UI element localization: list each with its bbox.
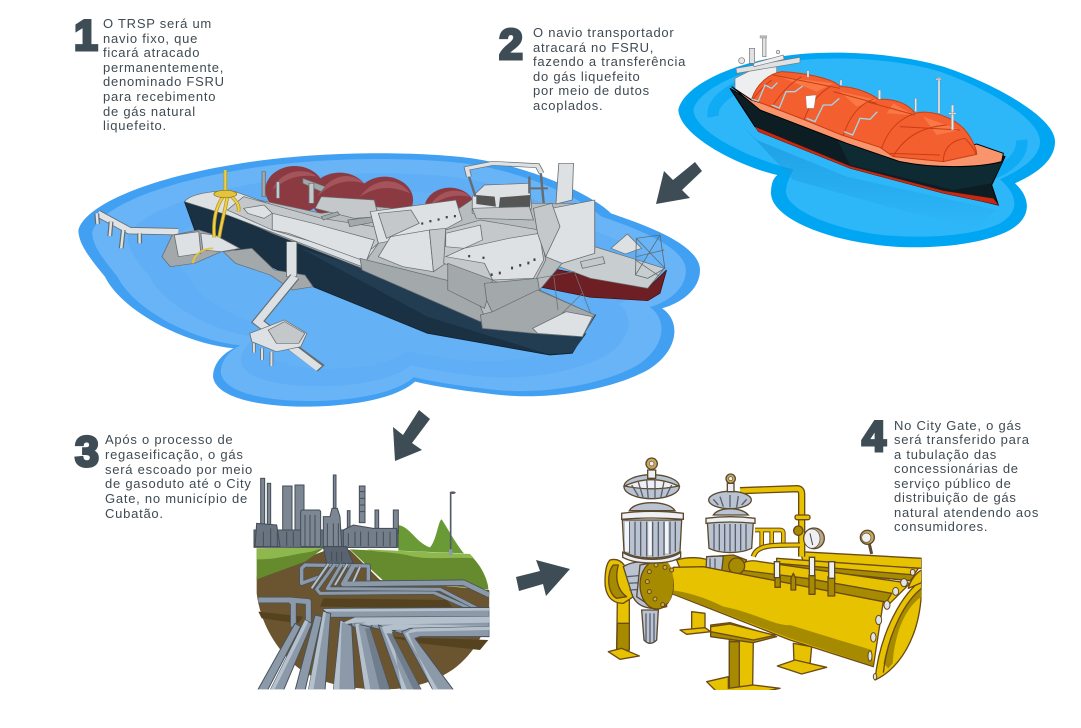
ship deck <box>732 87 1003 167</box>
trestle <box>258 277 321 368</box>
big actuator <box>622 458 683 563</box>
refinery and pipelines <box>254 475 489 691</box>
arm <box>98 213 178 232</box>
yard and fore deck equipment <box>227 197 378 257</box>
step 1 text: O TRSP será um <box>103 16 212 31</box>
step 2 text: por meio de dutos <box>533 83 650 98</box>
water: FSRU <box>78 153 700 407</box>
step 1 text: permanentemente, <box>103 60 224 75</box>
step 3 text: Após o processo de <box>105 432 233 447</box>
spherical tanks <box>265 166 475 229</box>
supports <box>680 612 827 692</box>
refinery skyline <box>254 475 398 563</box>
instruments <box>774 557 835 596</box>
step 1 text: de gás natural <box>103 104 196 119</box>
main cylinder <box>667 567 883 667</box>
column <box>287 242 297 277</box>
arrow: FSRU to pipeline <box>393 410 430 461</box>
step 2 text: fazendo a transferência <box>533 54 686 69</box>
arrow: pipeline to city gate <box>516 560 570 596</box>
step 4 text: natural atendendo aos <box>894 505 1039 520</box>
step 4 text: concessionárias de <box>894 461 1019 476</box>
back pipes <box>800 552 922 568</box>
street lamp <box>449 491 456 555</box>
step 3 number: 3 <box>75 428 99 476</box>
end flange <box>868 569 922 680</box>
step 4 text: No City Gate, o gás <box>894 418 1022 433</box>
step 3 text: de gasoduto até o City <box>105 476 252 491</box>
yellow gantry <box>214 170 239 237</box>
masts <box>806 71 956 130</box>
FSRU ship <box>184 163 596 355</box>
step 4 text: a tubulação das <box>894 447 997 462</box>
ship superstructure <box>735 36 800 100</box>
step 4 text: consumidores. <box>894 519 988 534</box>
bow deck <box>184 191 378 267</box>
step 2 text: O navio transportador <box>533 25 674 40</box>
second actuator <box>706 474 755 575</box>
step 3 text: Cubatão. <box>105 506 164 521</box>
step 1 text: ficará atracado <box>103 45 200 60</box>
step 1 number: 1 <box>74 12 98 60</box>
step 3 text: Gate, no município de <box>105 491 248 506</box>
rear block <box>556 163 573 204</box>
deck base <box>227 195 595 337</box>
left valve and flange <box>605 559 674 659</box>
step 1 text: navio fixo, que <box>103 31 198 46</box>
ship hull <box>730 88 1005 205</box>
step 2 text: atracará no FSRU, <box>533 40 654 55</box>
step 1 text: denominado FSRU <box>103 74 225 89</box>
step 2 number: 2 <box>499 21 523 69</box>
gauges <box>804 528 874 554</box>
step 3 text: será escoado por meio <box>105 462 253 477</box>
aft block <box>444 220 546 283</box>
lower pipes <box>257 607 489 691</box>
hills <box>398 519 464 553</box>
step 1 text: liquefeito. <box>103 118 167 133</box>
mid cylinder <box>740 561 910 603</box>
hull <box>184 202 596 355</box>
platform <box>162 230 240 267</box>
step 4 number: 4 <box>862 413 886 461</box>
step 3 text: regaseificação, o gás <box>105 447 244 462</box>
rear yellow rail pipes <box>740 489 810 557</box>
arrow: carrier to FSRU <box>656 162 702 204</box>
step 2 text: do gás liquefeito <box>533 69 640 84</box>
cargo tanks <box>752 72 977 162</box>
moored carrier with red hull <box>536 234 667 301</box>
step 2 text: acoplados. <box>533 98 603 113</box>
navigation bridge <box>472 183 531 220</box>
stern deck <box>480 290 595 337</box>
LNG carrier ship <box>730 36 1005 205</box>
loading gantry and trestle <box>97 170 321 368</box>
green fields <box>257 547 325 579</box>
city gate station <box>605 458 922 692</box>
tank pipes <box>752 83 877 135</box>
midship block <box>360 258 484 322</box>
water: LNG carrier <box>678 53 1055 247</box>
step 4 text: será transferido para <box>894 432 1030 447</box>
step 1 text: para recebimento <box>103 89 216 104</box>
upper pipes <box>258 564 489 627</box>
step 4 text: distribuição de gás <box>894 490 1017 505</box>
ground <box>257 550 489 689</box>
step 4 text: serviço público de <box>894 476 1012 491</box>
